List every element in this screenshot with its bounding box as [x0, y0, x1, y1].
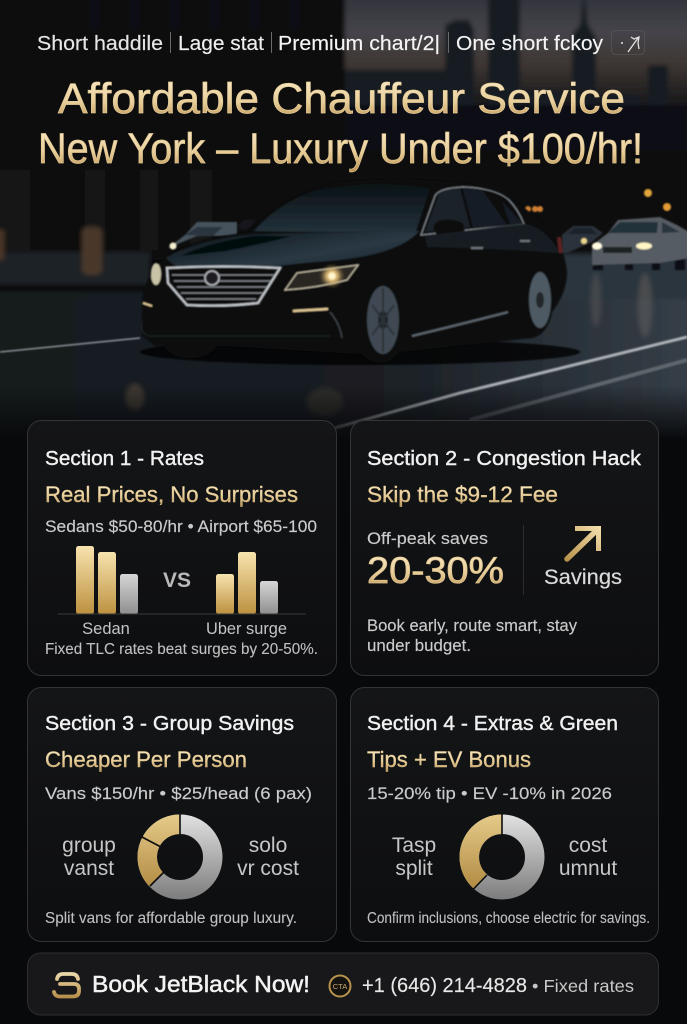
icon: gold upward arrow — [567, 528, 598, 559]
text: van pricing: Vans $150/hr • $25/head (6 pax) — [45, 784, 312, 803]
text: fixed rates: • Fixed rates — [532, 976, 634, 996]
icon: CTA coin — [330, 976, 350, 996]
donut chart: tip split versus cost: split — [395, 857, 433, 880]
donut chart: group versus solo: vr cost — [237, 857, 299, 880]
text: rates takeaway: Fixed TLC rates beat surges by 20-50%. — [45, 641, 318, 658]
donut chart: tip split versus cost: cost — [569, 834, 607, 857]
text: congestion takeaway: under budget. — [367, 636, 471, 655]
title: New York – Luxury Under $100/hr! — [38, 125, 643, 173]
call to action bar — [28, 953, 658, 1015]
text: extras takeaway: Confirm inclusions, choose electric for savings. — [367, 910, 650, 927]
donut chart: tip split versus cost: Tasp — [392, 834, 436, 857]
text: phone number: +1 (646) 214-4828 — [362, 975, 527, 997]
label: savings: Savings — [544, 565, 622, 589]
top strip with four short labels — [37, 32, 603, 55]
top strip with four short labels: One short fckoy — [456, 33, 603, 55]
heading: section 4: Section 4 - Extras & Green — [367, 712, 618, 735]
donut chart: group versus solo: vanst — [64, 857, 114, 880]
text: congestion takeaway — [367, 616, 577, 655]
heading: section 3: Section 3 - Group Savings — [45, 712, 294, 735]
large stat: 20-30%: 20-30% — [367, 550, 504, 591]
subheading: real prices: Real Prices, No Surprises — [45, 482, 298, 507]
top strip with four short labels: Lage stat — [178, 33, 264, 55]
bar chart: sedan versus uber surge — [58, 546, 306, 638]
text: off-peak saves: Off-peak saves — [367, 529, 488, 548]
text: congestion takeaway: Book early, route smart, stay — [367, 616, 577, 635]
panel: section 4 extras and green — [350, 688, 658, 942]
illustration: black luxury sedan — [140, 179, 580, 365]
donut chart: tip split versus cost — [392, 814, 617, 890]
panel: section 2 congestion hack — [350, 420, 658, 676]
top strip with four short labels: Short haddile — [37, 33, 163, 55]
bar chart: sedan versus uber surge: VS — [163, 569, 191, 592]
panel: section 1 rates — [28, 420, 336, 676]
icon: small plane badge — [612, 30, 644, 54]
donut chart: group versus solo — [62, 814, 299, 890]
subheading: cheaper per person: Cheaper Per Person — [45, 747, 247, 772]
donut chart: tip split versus cost: umnut — [559, 857, 617, 880]
title — [38, 75, 643, 173]
bar chart: sedan versus uber surge: Uber surge — [206, 620, 287, 638]
subheading: skip the fee: Skip the $9-12 Fee — [367, 482, 558, 507]
bar chart: sedan versus uber surge: Sedan — [82, 620, 130, 638]
panel: section 3 group savings — [28, 688, 336, 942]
top strip with four short labels: Premium chart/2| — [278, 33, 440, 55]
donut chart: group versus solo: solo — [249, 834, 287, 857]
text: tip and EV numbers: 15-20% tip • EV -10% in 2026 — [367, 784, 612, 803]
heading: section 1: Section 1 - Rates — [45, 447, 204, 470]
subheading: tips and EV bonus: Tips + EV Bonus — [367, 747, 531, 772]
text: book now: Book JetBlack Now! — [92, 971, 310, 997]
text: sedan and airport prices: Sedans $50-80/hr • Airport $65-100 — [45, 517, 317, 536]
donut chart: group versus solo: group — [62, 834, 116, 857]
heading: section 2: Section 2 - Congestion Hack — [367, 447, 642, 470]
text: group takeaway: Split vans for affordable group luxury. — [45, 910, 297, 927]
icon: gold logo — [54, 974, 79, 996]
title: Affordable Chauffeur Service — [58, 75, 625, 123]
icon: CTA coin: CTA — [333, 982, 347, 991]
